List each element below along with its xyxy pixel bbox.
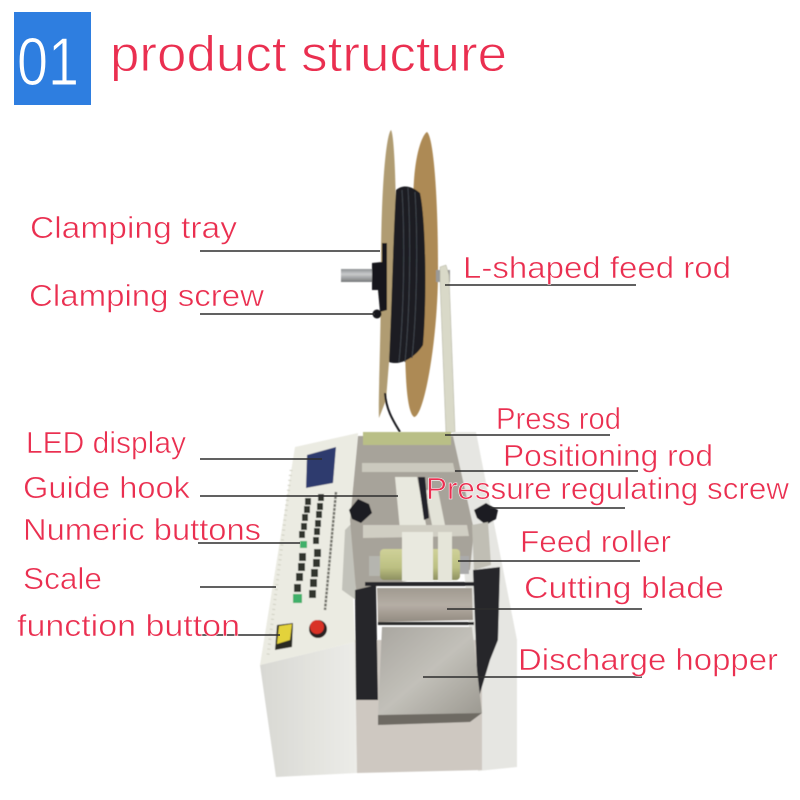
- photo: cutting machine: [260, 432, 517, 777]
- label: Cutting blade: Cutting blade: [524, 570, 724, 605]
- discharge hopper: [378, 627, 482, 715]
- label: Feed roller: Feed roller: [520, 524, 671, 559]
- control panel: [260, 433, 358, 665]
- scale strip: [268, 470, 291, 655]
- title: product structure: [110, 26, 507, 82]
- function button: [275, 623, 293, 650]
- label: function button: function button: [17, 608, 240, 643]
- yellow-green top bar: [363, 432, 451, 445]
- label: L-shaped feed rod: L-shaped feed rod: [463, 250, 731, 285]
- L-shaped feed rod: [440, 265, 455, 433]
- label: Clamping tray: Clamping tray: [30, 210, 238, 245]
- cable coil: [389, 186, 425, 363]
- clamp hub: [372, 243, 387, 312]
- label: LED display: LED display: [26, 425, 186, 460]
- upper clamp bar: [362, 463, 455, 472]
- label: Pressure regulating screw: Pressure regulating screw: [426, 471, 790, 506]
- label: Guide hook: Guide hook: [23, 470, 191, 505]
- number badge: 01: [17, 24, 79, 100]
- left spool disc: [379, 130, 396, 418]
- label: Numeric buttons: Numeric buttons: [23, 512, 261, 547]
- clamping screw knob: [372, 310, 382, 318]
- photo: cable spool on holder: [341, 130, 455, 433]
- feed cable: [385, 393, 400, 432]
- deck interior: [350, 436, 474, 590]
- pressure screws: [349, 499, 372, 523]
- LED display: [306, 447, 336, 488]
- right spool disc: [405, 132, 438, 417]
- numeric buttons: [294, 494, 324, 598]
- label: Positioning rod: Positioning rod: [503, 438, 713, 473]
- label: Press rod: Press rod: [496, 401, 621, 436]
- red button: [309, 620, 327, 638]
- right gear: [472, 522, 491, 570]
- stainless front plate: [355, 640, 482, 773]
- label: Scale: Scale: [23, 561, 102, 596]
- machine right side: [452, 432, 517, 771]
- printed panel text strip: [325, 492, 336, 610]
- label: Clamping screw: Clamping screw: [29, 278, 265, 313]
- leader lines: [197, 251, 642, 677]
- label: Discharge hopper: Discharge hopper: [518, 642, 778, 677]
- machine left front: [260, 642, 357, 777]
- feed roller: [380, 549, 460, 580]
- cutting blade: [377, 588, 473, 622]
- panel shadow: [342, 520, 356, 600]
- white belts: [395, 477, 427, 530]
- lower clamp bar: [363, 525, 469, 538]
- spool shaft: [341, 269, 373, 282]
- side brackets: [355, 585, 378, 700]
